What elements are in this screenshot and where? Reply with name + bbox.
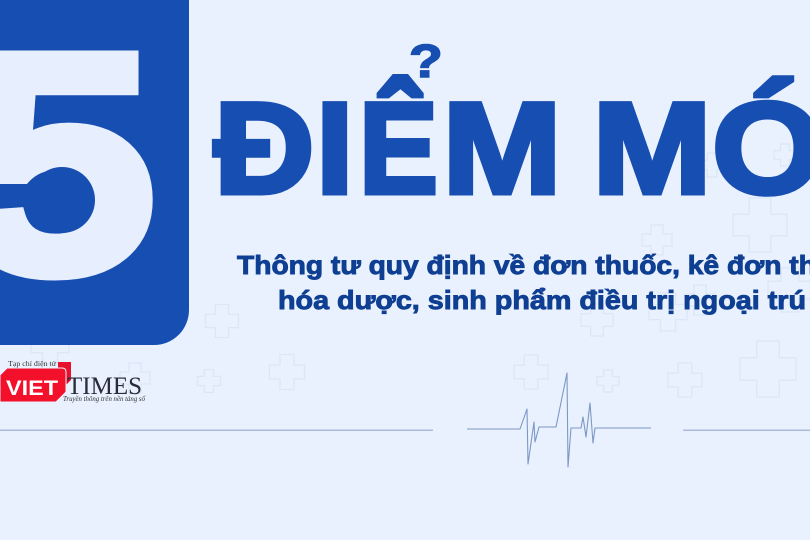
title: M [442,75,562,221]
blue panel [0,0,189,345]
title: M [592,75,712,221]
divider line left [0,430,433,431]
number 5 counter tail [0,186,40,207]
background plus pattern [31,144,810,397]
title [214,75,810,221]
subtitle line 1: Thông tư quy định về đơn thuốc, kê đơn thuốc [237,250,810,280]
logo: VietTimes [0,360,145,403]
logo tagline: Truyền thông trên nền tảng số [63,395,145,403]
icon: heartbeat line [467,373,651,467]
number 5 round counter [29,167,95,233]
logo word VIET: VIET [6,377,58,400]
logo top label: Tạp chí điện tử [8,360,56,368]
panel: number 5 [0,0,189,345]
title: I [316,76,354,221]
title: Đ [214,75,314,221]
title hook mark: ? [409,35,443,87]
logo word TIMES: TIMES [67,373,142,400]
divider line right [683,430,810,431]
red badge [0,368,66,402]
subtitle [237,250,810,315]
title: Ê [359,76,438,221]
red back corner [58,362,71,385]
subtitle line 2: hóa dược, sinh phẩm điều trị ngoại trú [278,285,806,315]
